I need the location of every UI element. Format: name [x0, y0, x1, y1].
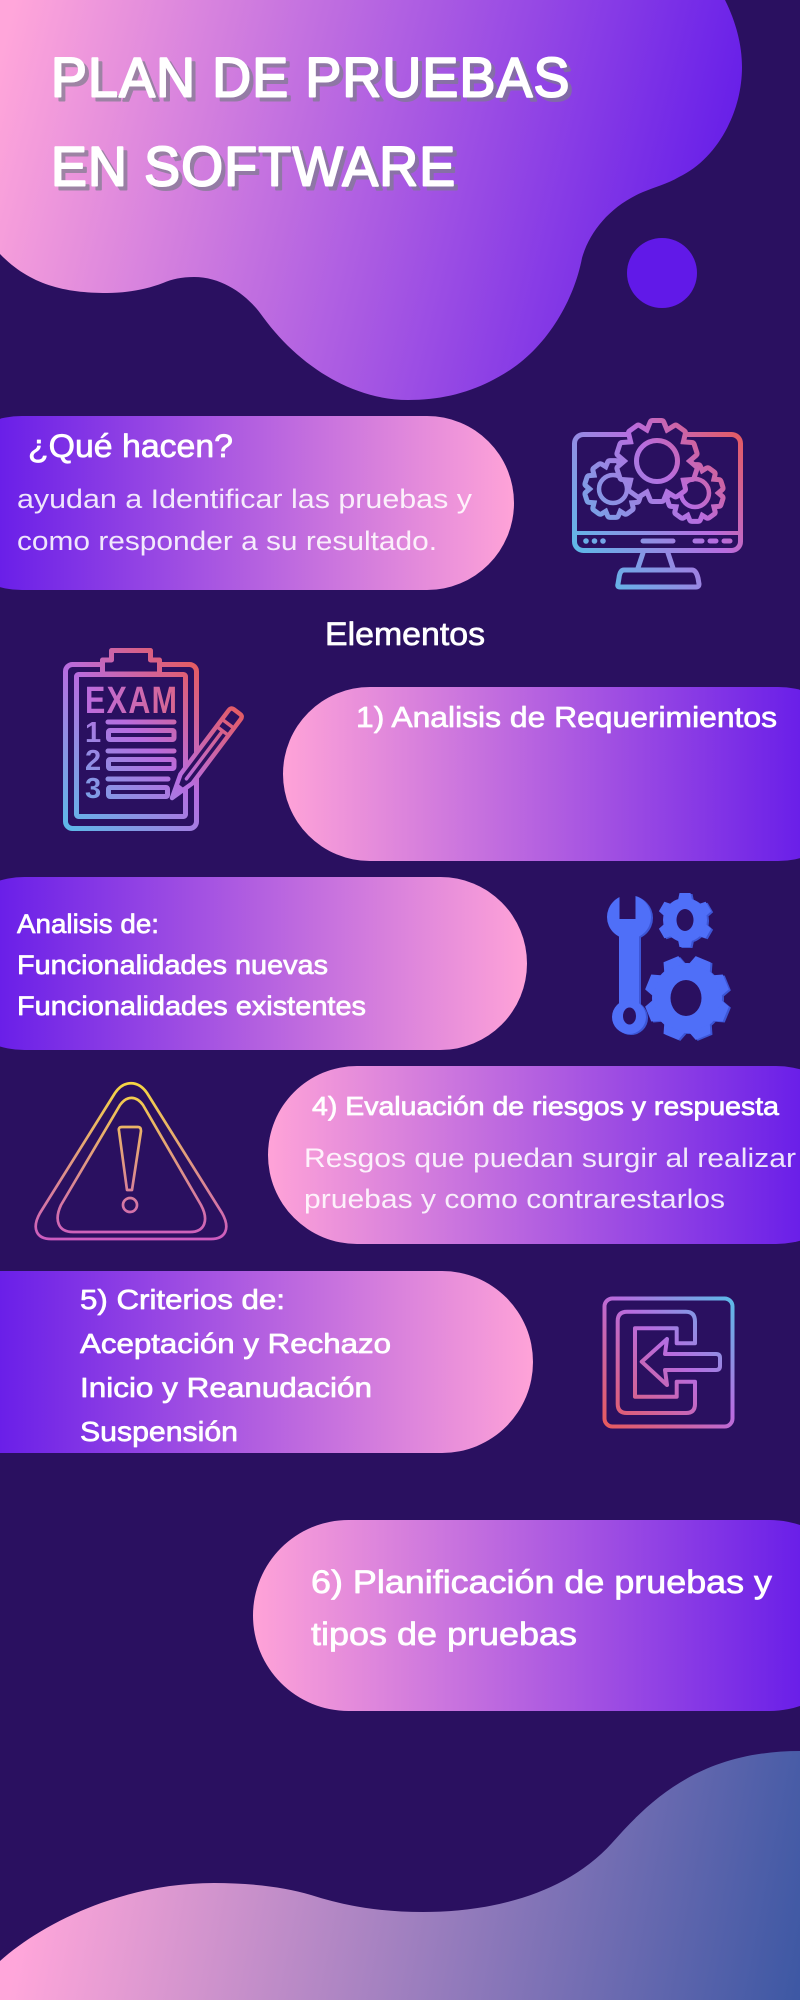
top blob [0, 0, 742, 400]
heading: 1) Analisis de Requerimientos [356, 702, 777, 734]
description [17, 484, 473, 556]
icon: warning triangle [36, 1083, 226, 1239]
decorative circle [627, 238, 697, 308]
heading: ¿Qué hacen? [28, 428, 233, 464]
panel: evaluacion de riesgos [268, 1066, 800, 1244]
pill background [0, 877, 527, 1050]
icon: exam clipboard and pencil: EXAM [85, 680, 177, 722]
panel: criterios [0, 1271, 533, 1453]
icon: wrench and gears [607, 890, 732, 1042]
text lines: 5) Criterios de: [80, 1284, 285, 1315]
description [304, 1143, 796, 1214]
icon: monitor with gears [572, 418, 743, 590]
heading: elementos: Elementos [325, 616, 485, 652]
pill background [0, 416, 514, 590]
text lines: Funcionalidades nuevas [17, 950, 328, 980]
pill background [268, 1066, 800, 1244]
icon: exam clipboard and pencil: 3 [85, 773, 101, 805]
title [51, 45, 569, 198]
bottom blob [0, 1751, 800, 2000]
icon: exit arrow [600, 1294, 737, 1431]
description: ayudan a Identificar las pruebas y [17, 484, 473, 514]
icon: exam clipboard and pencil: 2 [85, 745, 101, 777]
description: como responder a su resultado. [17, 526, 437, 556]
heading: 4) Evaluación de riesgos y respuesta [312, 1091, 780, 1121]
icon: exam clipboard and pencil: 1 [85, 717, 101, 749]
pill background [253, 1520, 800, 1711]
pill background [283, 687, 800, 861]
text lines: Analisis de: [17, 909, 159, 939]
title: PLAN DE PRUEBAS [51, 45, 569, 109]
text lines: Suspensión [80, 1416, 238, 1447]
description: Resgos que puedan surgir al realizar [304, 1143, 796, 1173]
small gear [658, 893, 714, 948]
text lines: Aceptación y Rechazo [80, 1328, 391, 1359]
panel: que hacen [0, 416, 514, 590]
panel: planificacion de pruebas [253, 1520, 800, 1711]
big gear [644, 955, 732, 1042]
text lines: tipos de pruebas [311, 1616, 577, 1652]
panel: analisis de requerimientos [283, 687, 800, 861]
pill background [0, 1271, 533, 1453]
panel: analisis de funcionalidades [0, 877, 527, 1050]
title: EN SOFTWARE [51, 134, 455, 198]
text lines [311, 1564, 772, 1652]
text lines: Funcionalidades existentes [17, 991, 366, 1021]
icon: exam clipboard and pencil [63, 648, 244, 831]
text lines: 6) Planificación de pruebas y [311, 1564, 772, 1600]
text lines [80, 1284, 391, 1447]
text lines [17, 909, 366, 1021]
text lines: Inicio y Reanudación [80, 1372, 372, 1403]
description: pruebas y como contrarestarlos [304, 1184, 725, 1214]
wrench [607, 890, 653, 1035]
